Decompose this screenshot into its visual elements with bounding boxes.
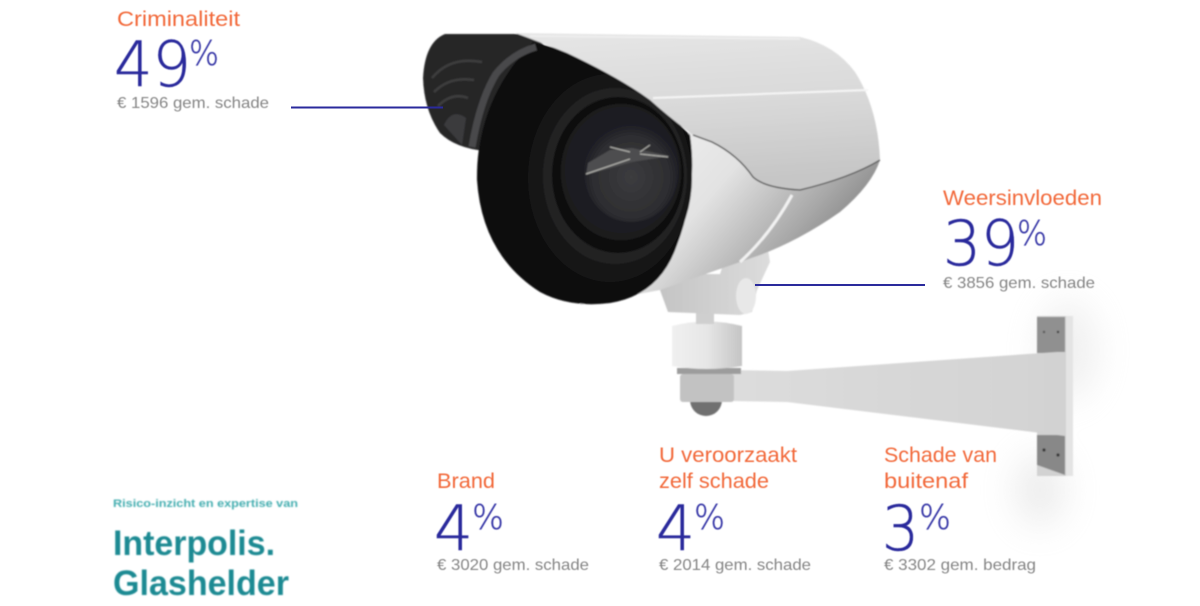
camera front rim [477,42,692,304]
stat: Brand: Brand [437,470,495,493]
swivel collar [672,322,742,369]
stat: Weersinvloeden: 39 [943,207,1019,280]
visor edge highlight [472,47,536,147]
stat: Brand: € 3020 gem. schade [437,557,589,574]
camera hood [515,33,880,190]
branding: Interpolis Glashelder [113,498,298,603]
stat: Criminaliteit [114,8,269,112]
stat: Weersinvloeden: % [1017,214,1047,254]
stat: U veroorzaakt zelf schade: € 2014 gem. schade [659,557,811,574]
branding: Interpolis Glashelder: Glashelder [113,564,289,603]
stat: U veroorzaakt zelf schade [656,444,811,574]
swivel bracket [660,250,770,324]
hood inner visor [423,34,640,151]
stat: U veroorzaakt zelf schade: % [694,498,725,538]
stat: Schade van buitenaf [882,444,1036,574]
wall mount plate [1037,316,1073,476]
stat: Brand [434,470,589,574]
stat: Schade van buitenaf: Schade van [884,444,997,467]
wall shadow [1016,300,1096,526]
stat: Schade van buitenaf: % [919,498,951,538]
stat: U veroorzaakt zelf schade: zelf schade [659,470,769,493]
leader line: weersinvloeden [755,284,925,286]
mount arm [730,352,1065,436]
lower housing and dome [677,368,741,416]
stat: Schade van buitenaf: buitenaf [884,470,968,493]
stat: Criminaliteit: Criminaliteit [117,8,240,31]
lens rings [528,74,692,282]
stat: Brand: 4 [434,492,473,565]
illustration: security camera [423,33,1073,476]
stat: U veroorzaakt zelf schade: U veroorzaakt [659,444,797,467]
stat: Weersinvloeden: Weersinvloeden [943,187,1102,210]
camera body [580,130,880,305]
stat: Criminaliteit: % [189,34,219,74]
branding: Interpolis Glashelder: Interpolis. [113,524,275,563]
stat: Criminaliteit: 49 [114,28,191,101]
stat: Weersinvloeden: € 3856 gem. schade [943,275,1095,292]
branding: Interpolis Glashelder: Risico-inzicht en expertise van [113,498,298,510]
stat: Schade van buitenaf: € 3302 gem. bedrag [884,557,1036,574]
stat: Schade van buitenaf: 3 [882,492,919,565]
stat: Criminaliteit: € 1596 gem. schade [117,95,269,112]
stat: Brand: % [472,498,504,538]
stat: U veroorzaakt zelf schade: 4 [656,492,695,565]
stat: Weersinvloeden [943,187,1102,292]
leader line: criminaliteit [291,106,443,108]
